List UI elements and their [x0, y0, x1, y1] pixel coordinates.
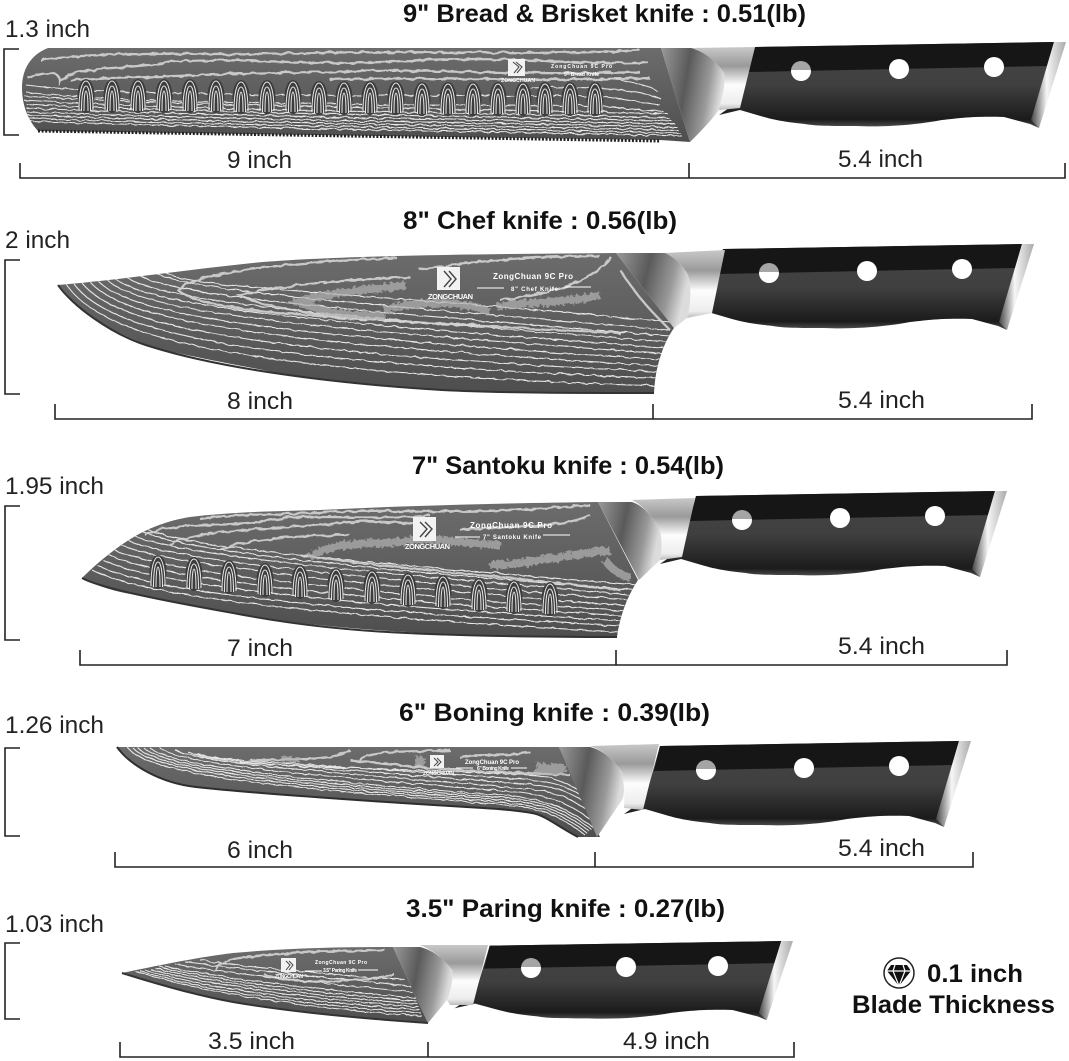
label: handle length 5.4 inch: 5.4 inch [838, 633, 925, 660]
dimension line: blade and handle length [80, 650, 1007, 665]
bolster face [598, 502, 662, 580]
handle: santoku knife [660, 491, 1007, 577]
icon: diamond badge [884, 958, 914, 988]
blade logo: ZongChuan 9C Pro [493, 272, 573, 281]
bolster face [661, 48, 725, 142]
knife 3: santoku [5, 452, 1007, 665]
blade logo: ZONGCHUAN [405, 542, 450, 551]
knife 4: boning [5, 699, 973, 867]
title: santoku knife: 7" Santoku knife : 0.54(lb) [412, 452, 724, 480]
blade: paring knife [122, 947, 428, 1023]
bracket: blade height [5, 506, 20, 640]
blade logo: ZongChuan 9C Pro [551, 64, 612, 70]
handle: chef knife [687, 244, 1034, 330]
bolster band [691, 47, 755, 110]
title: chef knife: 8" Chef knife : 0.56(lb) [403, 207, 677, 235]
bolster face [393, 947, 452, 1023]
label: blade height 1.3 inch: 1.3 inch [5, 16, 90, 43]
blade logo: ZONGCHUAN [501, 78, 535, 84]
bracket: blade height [5, 748, 20, 836]
knife 1: bread and brisket [4, 0, 1066, 178]
blade: chef knife [58, 253, 674, 393]
bolster band [420, 945, 488, 1005]
label: blade height 1.26 inch: 1.26 inch [5, 712, 104, 739]
label: blade length 7 inch: 7 inch [227, 635, 293, 662]
knife 5: paring [5, 895, 794, 1057]
blade logo [428, 267, 591, 301]
label: handle length 4.9 inch: 4.9 inch [623, 1028, 710, 1055]
blade logo [423, 755, 527, 777]
handle: boning knife [624, 741, 971, 827]
label: blade height 2 inch: 2 inch [5, 227, 70, 254]
handle: paring knife [455, 941, 793, 1020]
dimension line: blade and handle length [20, 163, 1065, 178]
label: blade length 6 inch: 6 inch [227, 837, 293, 864]
bolster band [665, 250, 725, 318]
blade logo [501, 59, 612, 84]
label: handle length 5.4 inch: 5.4 inch [838, 835, 925, 862]
blade logo: ZONGCHUAN [275, 974, 303, 980]
label: blade height 1.03 inch: 1.03 inch [5, 911, 104, 938]
label: handle length 5.4 inch: 5.4 inch [838, 146, 923, 173]
blade logo [275, 958, 378, 980]
label: blade length 3.5 inch: 3.5 inch [208, 1028, 295, 1055]
blade logo: ZongChuan 9C Pro [465, 760, 519, 766]
label: blade length 9 inch: 9 inch [227, 147, 292, 174]
blade logo [405, 517, 570, 551]
blade logo: 6" Boning Knife [477, 766, 509, 772]
blade grooves: bread knife [78, 79, 604, 116]
bolster band [590, 744, 659, 810]
bolster face [559, 747, 624, 837]
bracket: blade height [5, 943, 20, 1019]
blade logo: 8" Chef Knife [511, 287, 559, 293]
blade logo: ZongChuan 9C Pro [470, 521, 552, 530]
text: 0.1 inch: 0.1 inch [927, 960, 1023, 988]
title: boning knife: 6" Boning knife : 0.39(lb) [399, 699, 710, 727]
blade: boning knife [117, 747, 600, 837]
title: bread knife: 9" Bread & Brisket knife : 0.51(lb) [403, 0, 806, 28]
blade logo: ZongChuan 9C Pro [315, 960, 367, 966]
title: paring knife: 3.5" Paring knife : 0.27(lb) [406, 895, 725, 923]
label: handle length 5.4 inch: 5.4 inch [838, 387, 925, 414]
knife 2: chef [5, 207, 1034, 419]
blade logo: ZONGCHUAN [423, 771, 454, 777]
callout: blade thickness [852, 958, 1055, 1019]
label: blade length 8 inch: 8 inch [227, 388, 293, 415]
blade logo: 9" Bread Knife [564, 72, 599, 78]
bolster face [616, 253, 690, 328]
blade grooves: santoku knife [150, 555, 558, 616]
bracket: blade height [4, 49, 19, 135]
blade logo: ZONGCHUAN [428, 292, 473, 301]
blade: bread knife [22, 48, 690, 142]
label: blade height 1.95 inch: 1.95 inch [5, 473, 104, 500]
handle: bread knife [719, 42, 1066, 128]
blade: santoku knife [82, 502, 638, 637]
dimension line: blade and handle length [115, 852, 973, 867]
bracket: blade height [5, 260, 20, 394]
dimension line: blade and handle length [120, 1042, 794, 1057]
dimension line: blade and handle length [55, 404, 1032, 419]
text: blade thickness: Blade Thickness [852, 991, 1055, 1019]
blade logo: 3.5" Paring Knife [323, 968, 357, 974]
blade logo: 7" Santoku Knife [483, 535, 542, 541]
bolster band [632, 498, 695, 560]
